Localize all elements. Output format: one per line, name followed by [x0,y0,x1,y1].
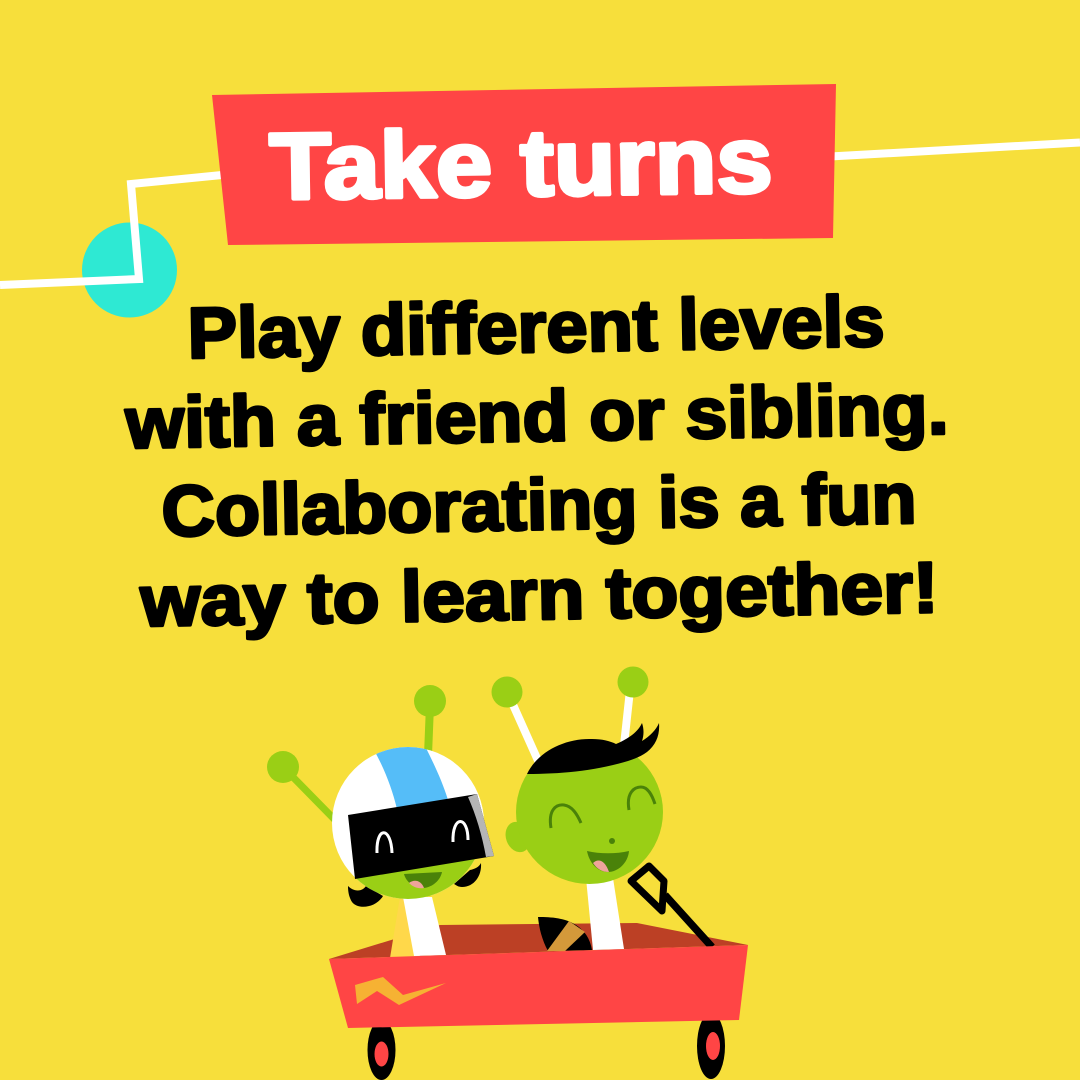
blue helmet stripe [376,747,448,808]
boy nose [609,838,615,844]
girl hair buns [348,863,481,907]
girl head [332,747,484,899]
title: Take turns [269,107,773,219]
body text: Collaborating is a fun [161,459,917,552]
boy eyes [550,787,655,828]
wagon handle [631,866,712,947]
boy neck [586,878,624,950]
girl mouth [404,872,442,888]
body text: way to learn together! [139,548,939,642]
boy mouth [587,851,629,872]
boy ear [501,818,535,856]
body text [124,282,949,642]
body text: Play different levels [187,282,885,374]
wagon lightning decal [355,977,446,1005]
connector line right [830,142,1080,156]
girl neck [390,897,446,958]
boy hair [527,723,659,774]
wagon [329,945,748,1080]
character: boy [492,666,663,950]
wagon body [329,945,748,1028]
connector line left [0,175,222,285]
wagon interior [329,923,748,959]
wagon wheels [368,1013,725,1080]
body text: with a friend or sibling. [124,370,949,464]
boy antennae [492,666,648,765]
girl visor [348,794,494,879]
girl antennae [267,685,446,823]
boy head [516,740,663,884]
character: girl with visor [267,685,500,958]
football [538,917,592,951]
icon: teal circle [82,222,177,318]
title banner [212,84,836,245]
